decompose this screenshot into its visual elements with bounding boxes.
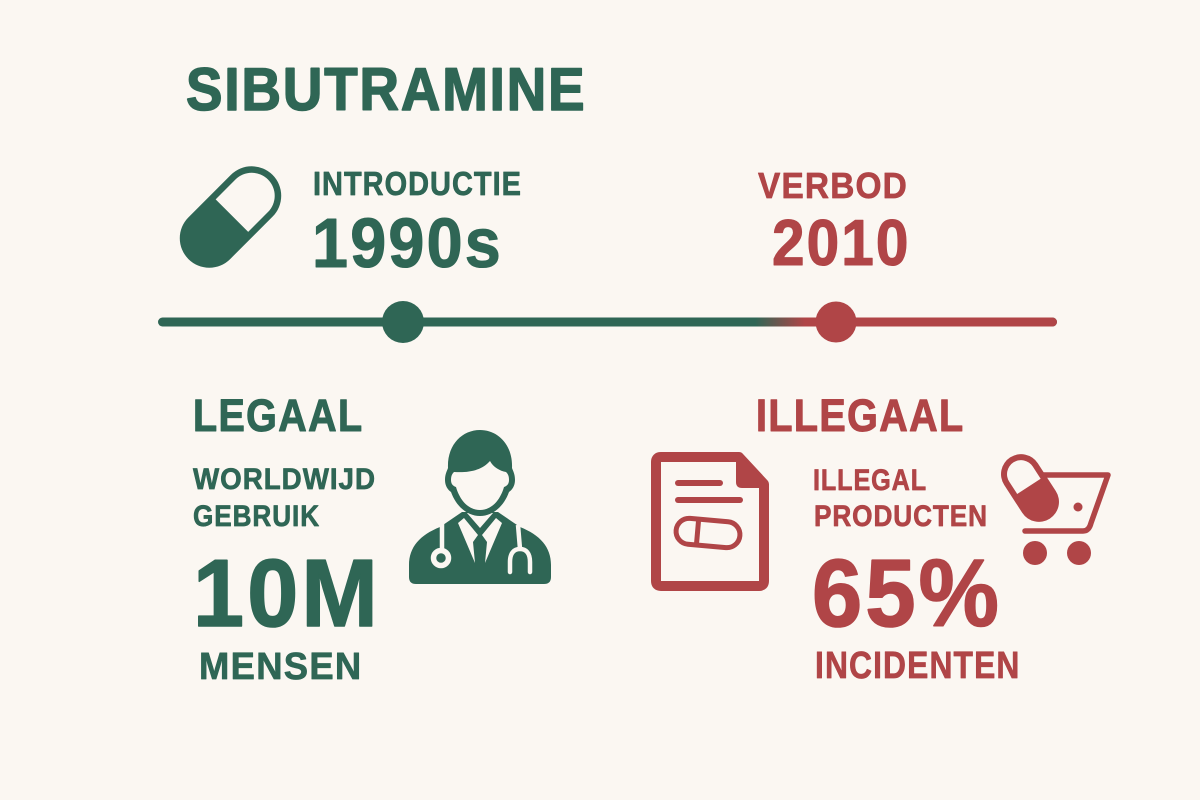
text: illegal products: PRODUCTEN: [814, 500, 988, 533]
icon: capsule: [168, 154, 293, 280]
stat: 10M: 10M: [193, 540, 381, 647]
text: illegal products: [813, 464, 988, 533]
ban date block: 2010: [772, 206, 910, 279]
ban date block: VERBOD: [758, 165, 908, 206]
icon: document with pill: [656, 457, 766, 586]
ban date block: [758, 165, 910, 279]
label: people: MENSEN: [199, 646, 362, 688]
introduction date block: INTRODUCTIE: [313, 165, 522, 202]
panel: legal: [193, 390, 551, 688]
heading: illegal: ILLEGAAL: [756, 390, 964, 441]
text: illegal products: ILLEGAL: [813, 464, 927, 497]
title: SIBUTRAMINE: [186, 56, 586, 123]
panel: illegal: [656, 390, 1108, 687]
timeline: [158, 301, 1057, 343]
icon: pill in shopping cart: [993, 446, 1108, 565]
text: worldwide use: GEBRUIK: [193, 500, 320, 533]
text: worldwide use: WORLDWIJD: [193, 463, 376, 496]
stat: 65%: 65%: [812, 540, 1002, 647]
heading: legal: LEGAAL: [193, 390, 364, 441]
text: worldwide use: [193, 463, 376, 533]
label: incidents: INCIDENTEN: [815, 645, 1020, 687]
introduction date block: 1990s: [312, 204, 503, 282]
introduction date block: [312, 165, 522, 282]
icon: doctor: [409, 430, 551, 584]
